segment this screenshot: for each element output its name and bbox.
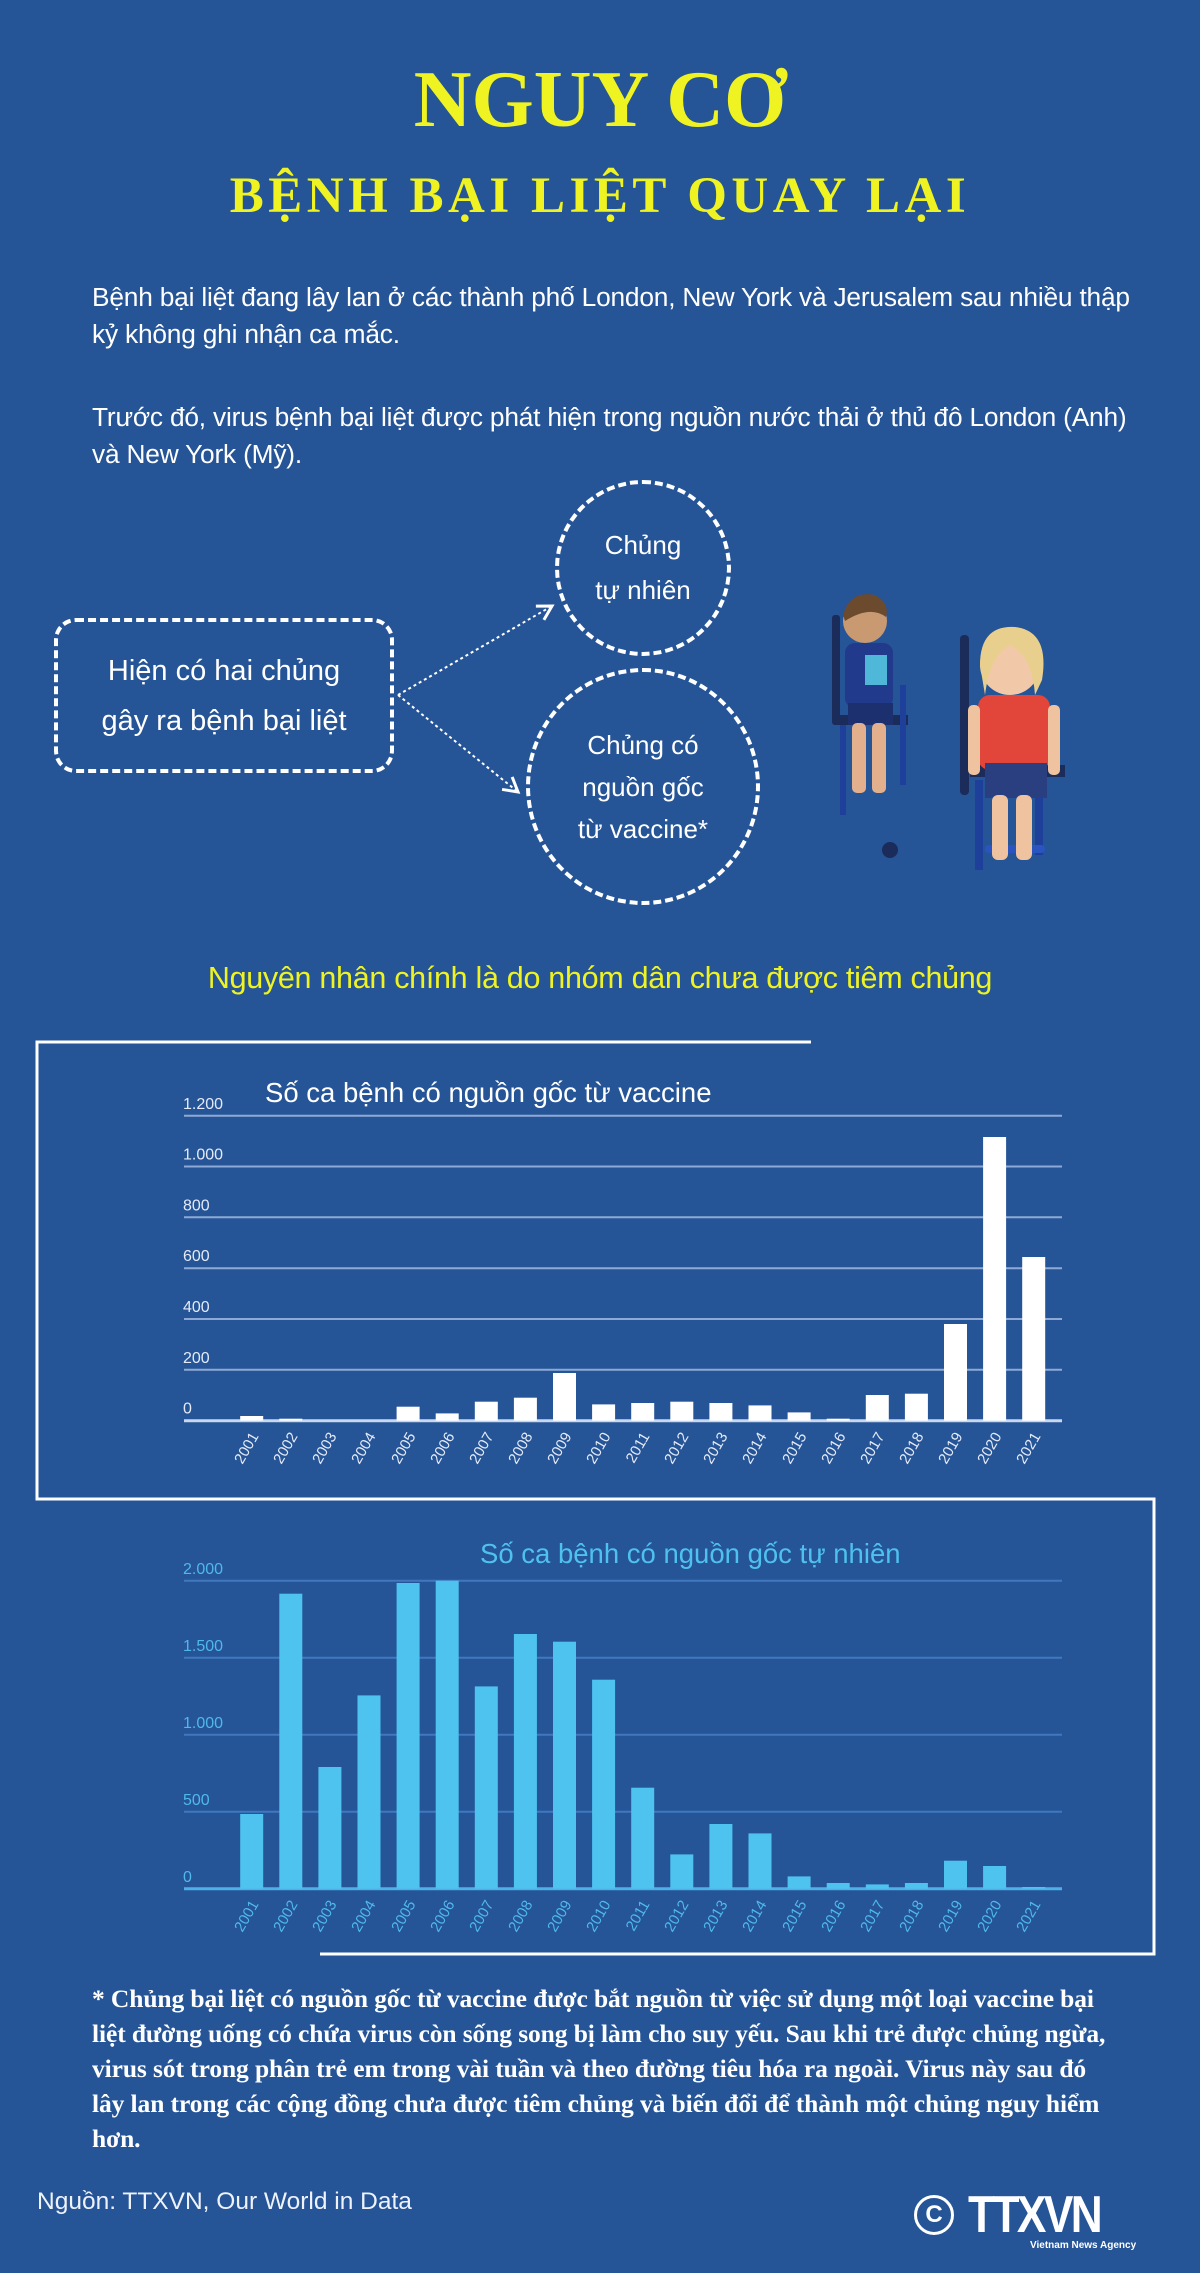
footnote: virus sót trong phân trẻ em trong vài tuần và theo đường tiêu hóa ra ngoài. Virus này sau đó bbox=[92, 2054, 1086, 2083]
logo text: TTXVN bbox=[968, 2186, 1100, 2244]
bar chart: natural (wild) cases: 2017 bbox=[857, 1898, 888, 1935]
bar chart: vaccine-derived cases: 2019 bbox=[935, 1430, 966, 1467]
bar chart: natural (wild) cases: 2013 bbox=[700, 1898, 731, 1935]
bar chart: vaccine-derived cases: 400 bbox=[183, 1299, 210, 1316]
bar chart: vaccine-derived cases: 2012 bbox=[661, 1430, 692, 1467]
bar chart: natural (wild) cases: 2009 bbox=[544, 1898, 575, 1935]
bar chart: natural (wild) cases: 2016 bbox=[818, 1898, 849, 1935]
circle: natural strain: Chủng bbox=[605, 530, 681, 560]
bar chart: natural (wild) cases: 2007 bbox=[466, 1898, 497, 1935]
logo tagline: Vietnam News Agency bbox=[1030, 2240, 1136, 2251]
bar chart: vaccine-derived cases: 2010 bbox=[583, 1430, 614, 1467]
bar chart: vaccine-derived cases: 2009 bbox=[544, 1430, 575, 1467]
box: two strains cause polio: gây ra bệnh bại liệt bbox=[101, 704, 347, 736]
bar chart: vaccine-derived cases: 2018 bbox=[896, 1430, 927, 1467]
bar chart: vaccine-derived cases: 2014 bbox=[739, 1430, 770, 1467]
bar chart: natural (wild) cases: 2003 bbox=[309, 1898, 340, 1935]
circle: natural strain: tự nhiên bbox=[595, 575, 691, 605]
bar chart: vaccine-derived cases: 2021 bbox=[1013, 1430, 1044, 1467]
bar chart: vaccine-derived cases: 1.200 bbox=[183, 1096, 223, 1113]
bar chart: vaccine-derived cases: 2004 bbox=[348, 1430, 379, 1467]
bar chart: vaccine-derived cases: 2017 bbox=[857, 1430, 888, 1467]
bar chart: vaccine-derived cases: 2001 bbox=[231, 1430, 262, 1467]
intro paragraph 1: Bệnh bại liệt đang lây lan ở các thành phố London, New York và Jerusalem sau nhiều thập bbox=[92, 282, 1130, 312]
bar chart: vaccine-derived cases: 200 bbox=[183, 1350, 210, 1367]
bar chart: natural (wild) cases: 2021 bbox=[1013, 1898, 1044, 1935]
bar chart: vaccine-derived cases: 2016 bbox=[818, 1430, 849, 1467]
icon: copyright bbox=[914, 2195, 954, 2235]
logo: TTXVN bbox=[914, 2186, 1136, 2251]
title: NGUY CƠ bbox=[414, 56, 786, 144]
bar chart: natural (wild) cases: 500 bbox=[183, 1792, 210, 1809]
bar chart: vaccine-derived cases: 800 bbox=[183, 1197, 210, 1214]
footnote bbox=[92, 1984, 1105, 2153]
bar chart: natural (wild) cases: 2008 bbox=[505, 1898, 536, 1935]
bar chart: natural (wild) cases: 2001 bbox=[231, 1898, 262, 1935]
bar chart: natural (wild) cases: 2014 bbox=[739, 1898, 770, 1935]
bar chart: natural (wild) cases: 2018 bbox=[896, 1898, 927, 1935]
bar chart: natural (wild) cases: 1.000 bbox=[183, 1715, 223, 1732]
intro paragraph 2 bbox=[92, 402, 1126, 469]
box: two strains cause polio: Hiện có hai chủng bbox=[108, 654, 340, 686]
bar chart: natural (wild) cases: 2012 bbox=[661, 1898, 692, 1935]
intro paragraph 1 bbox=[92, 282, 1130, 349]
source: Nguồn: TTXVN, Our World in Data bbox=[37, 2188, 412, 2215]
footnote: hơn. bbox=[92, 2124, 140, 2153]
circle: vaccine-derived strain bbox=[526, 668, 760, 905]
bar chart: vaccine-derived cases: 2002 bbox=[270, 1430, 301, 1467]
box: two strains cause polio bbox=[54, 618, 394, 773]
chart title: Số ca bệnh có nguồn gốc tự nhiên bbox=[480, 1538, 901, 1569]
bar chart: natural (wild) cases bbox=[183, 1538, 1062, 1935]
bar chart: vaccine-derived cases: 600 bbox=[183, 1248, 210, 1265]
bar chart: vaccine-derived cases: 2005 bbox=[388, 1430, 419, 1467]
bar chart: natural (wild) cases: 2005 bbox=[388, 1898, 419, 1935]
icon: copyright: C bbox=[925, 2201, 943, 2228]
diagram: two strains bbox=[54, 480, 1065, 905]
arrows bbox=[397, 604, 555, 794]
bar chart: vaccine-derived cases bbox=[183, 1077, 1062, 1467]
chart title: Số ca bệnh có nguồn gốc từ vaccine bbox=[265, 1077, 712, 1108]
subtitle: BỆNH BẠI LIỆT QUAY LẠI bbox=[230, 168, 970, 224]
bar chart: vaccine-derived cases: 2011 bbox=[623, 1430, 653, 1466]
bar chart: natural (wild) cases: 2.000 bbox=[183, 1561, 223, 1578]
intro paragraph 1: kỷ không ghi nhận ca mắc. bbox=[92, 319, 400, 349]
heading: main cause: Nguyên nhân chính là do nhóm dân chưa được tiêm chủng bbox=[208, 961, 992, 995]
circle: vaccine-derived strain: Chủng có bbox=[587, 730, 699, 760]
bar chart: vaccine-derived cases: 0 bbox=[183, 1401, 192, 1418]
bar chart: natural (wild) cases: 2006 bbox=[427, 1898, 458, 1935]
bar chart: natural (wild) cases: 2019 bbox=[935, 1898, 966, 1935]
bar chart: natural (wild) cases: 2004 bbox=[348, 1898, 379, 1935]
bar chart: vaccine-derived cases: 2015 bbox=[779, 1430, 810, 1467]
bar chart: natural (wild) cases: 2002 bbox=[270, 1898, 301, 1935]
bar chart: natural (wild) cases: 2010 bbox=[583, 1898, 614, 1935]
bar chart: natural (wild) cases: 2011 bbox=[623, 1898, 653, 1934]
bar chart: vaccine-derived cases: 1.000 bbox=[183, 1146, 223, 1164]
footnote: liệt đường uống có chứa virus còn sống song bị làm cho suy yếu. Sau khi trẻ được chủng ngừa, bbox=[92, 2019, 1105, 2048]
bar chart: vaccine-derived cases: 2008 bbox=[505, 1430, 536, 1467]
circle: natural strain bbox=[555, 480, 731, 656]
bar chart: natural (wild) cases: 2020 bbox=[974, 1898, 1005, 1935]
bar chart: vaccine-derived cases: 2007 bbox=[466, 1430, 497, 1467]
bar chart: natural (wild) cases: 0 bbox=[183, 1869, 192, 1886]
bar chart: vaccine-derived cases: 2013 bbox=[700, 1430, 731, 1467]
bar chart: vaccine-derived cases: 2003 bbox=[309, 1430, 340, 1467]
intro paragraph 2: Trước đó, virus bệnh bại liệt được phát hiện trong nguồn nước thải ở thủ đô London (Anh) bbox=[92, 402, 1126, 432]
intro paragraph 2: và New York (Mỹ). bbox=[92, 439, 302, 469]
circle: vaccine-derived strain: từ vaccine* bbox=[578, 814, 708, 844]
bar chart: vaccine-derived cases: 2006 bbox=[427, 1430, 458, 1467]
bar chart: natural (wild) cases: 1.500 bbox=[183, 1638, 223, 1655]
illustration: children in wheelchairs bbox=[832, 594, 1065, 870]
footnote: lây lan trong các cộng đồng chưa được tiêm chủng và biến đổi để thành một chủng nguy hiểm bbox=[92, 2089, 1099, 2118]
bar chart: vaccine-derived cases: 2020 bbox=[974, 1430, 1005, 1467]
footnote: * Chủng bại liệt có nguồn gốc từ vaccine được bắt nguồn từ việc sử dụng một loại vaccine bại bbox=[92, 1984, 1094, 2013]
bar chart: natural (wild) cases: 2015 bbox=[779, 1898, 810, 1935]
circle: vaccine-derived strain: nguồn gốc bbox=[582, 772, 704, 802]
